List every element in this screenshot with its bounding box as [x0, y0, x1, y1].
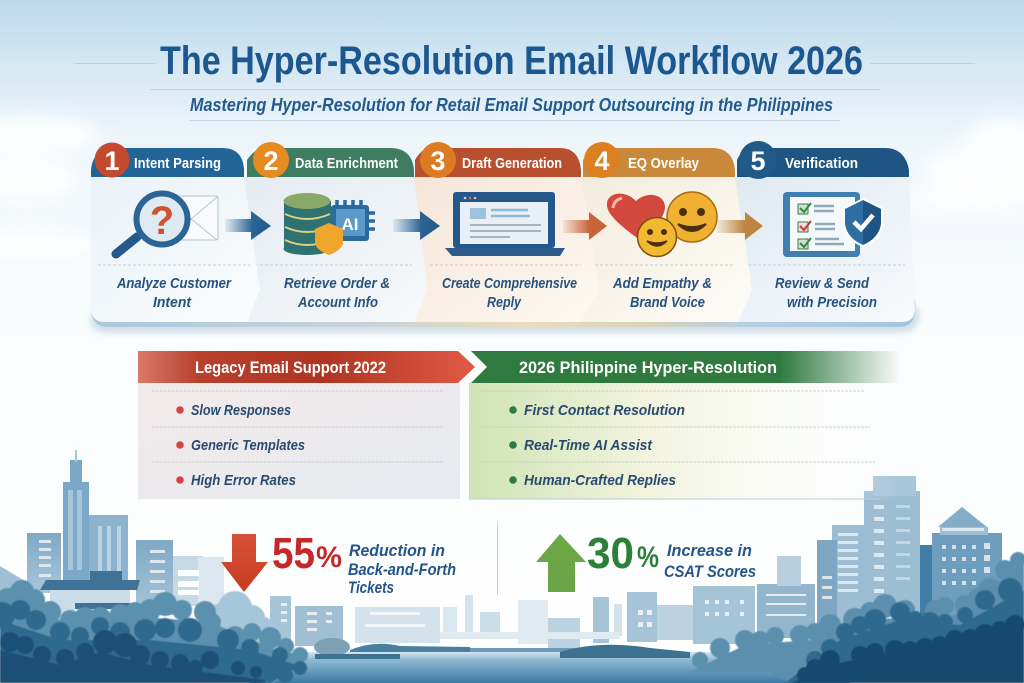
clouds [0, 115, 1024, 259]
legacy items [176, 402, 305, 489]
caption 5 [775, 275, 877, 311]
heading 1: Intent Parsing [134, 155, 221, 172]
caption 4 [612, 275, 712, 311]
legacy items: Generic Templates [191, 437, 305, 454]
heading 2: Data Enrichment [295, 155, 398, 172]
comparison table [138, 351, 900, 499]
figure 55%: % [316, 541, 342, 574]
figure 30%: 30 [587, 529, 634, 578]
water [250, 652, 850, 683]
metrics [184, 520, 800, 597]
icon: checklist with shield [783, 192, 883, 257]
title rules [75, 64, 975, 120]
metric: 30% increase [536, 529, 756, 592]
caption 1: Analyze Customer [116, 275, 232, 292]
badge 5: 5 [750, 146, 766, 176]
heading 4: EQ Overlay [628, 155, 700, 172]
hyper-resolution header [471, 351, 900, 383]
badge 3 [420, 142, 456, 178]
badge 3: 3 [430, 146, 446, 176]
caption 4: Add Empathy & [612, 275, 712, 292]
legacy items: High Error Rates [191, 472, 296, 489]
icon: magnifier and envelope: ? [150, 199, 174, 243]
arrow 3 [563, 212, 607, 240]
caption 3: Reply [487, 294, 522, 311]
caption [664, 541, 756, 581]
title: The Hyper-Resolution Email Workflow 2026 [160, 39, 863, 83]
caption: Tickets [348, 578, 394, 597]
arrow 1 [225, 211, 271, 240]
badge 1: 1 [104, 146, 120, 176]
panel: legacy [138, 351, 475, 499]
arrow 4 [717, 212, 763, 240]
figure 55% [272, 529, 342, 578]
caption 2 [284, 275, 390, 311]
caption 5: Review & Send [775, 275, 870, 292]
caption 1 [116, 275, 232, 311]
hyper-resolution items [509, 402, 685, 489]
caption: CSAT Scores [664, 562, 756, 581]
caption: Reduction in [349, 541, 445, 560]
figure 55%: 55 [272, 529, 315, 578]
legacy items: Slow Responses [191, 402, 291, 419]
icon: database with AI chip: AI [342, 215, 358, 234]
middle buildings [270, 556, 815, 648]
skyline [0, 450, 1024, 683]
figure 30%: % [637, 541, 659, 574]
caption 3 [442, 275, 577, 311]
metric: 55% reduction [221, 529, 456, 597]
legacy header: Legacy Email Support 2022 [195, 359, 386, 377]
caption 4: Brand Voice [630, 294, 705, 311]
icon: laptop [445, 192, 565, 256]
card shadow [90, 300, 920, 333]
hyper-resolution items: First Contact Resolution [524, 402, 685, 419]
icon: database with AI chip [284, 193, 375, 255]
caption 1: Intent [153, 294, 192, 311]
panel: hyper-resolution [469, 351, 900, 499]
badge 4 [584, 142, 620, 178]
heading 3: Draft Generation [462, 155, 562, 172]
right trees [690, 552, 1024, 683]
badge 1 [94, 142, 130, 178]
step 2 card [235, 142, 428, 322]
left trees [0, 580, 308, 683]
card rim [91, 300, 915, 327]
left buildings [0, 450, 224, 622]
badge 5 [739, 141, 777, 179]
hyper-resolution items: Real-Time AI Assist [524, 437, 653, 454]
badge 2 [253, 142, 289, 178]
step 4 card [575, 142, 752, 322]
icon: heart and smileys [607, 192, 717, 256]
caption 5: with Precision [787, 294, 877, 311]
caption [348, 541, 456, 597]
arrow 2 [393, 211, 440, 240]
process steps [90, 141, 920, 333]
icon: down arrow [221, 534, 268, 592]
figure 30% [587, 529, 659, 578]
legacy header [138, 351, 475, 383]
caption: Back-and-Forth [348, 560, 456, 579]
heading 5: Verification [785, 155, 858, 172]
icon: up arrow [536, 534, 586, 592]
caption 2: Account Info [297, 294, 378, 311]
caption: Increase in [667, 541, 752, 560]
step 3 card [405, 142, 599, 322]
step 5 card [725, 141, 915, 322]
caption 2: Retrieve Order & [284, 275, 390, 292]
hyper-resolution header: 2026 Philippine Hyper-Resolution [519, 359, 777, 377]
icon: magnifier and envelope [116, 194, 218, 254]
right buildings [817, 476, 1002, 630]
badge 4: 4 [594, 146, 610, 176]
hyper-resolution items: Human-Crafted Replies [524, 472, 676, 489]
shoreline [314, 638, 690, 659]
step 1 card [91, 142, 260, 322]
caption 3: Create Comprehensive [442, 275, 577, 292]
badge 2: 2 [263, 146, 279, 176]
subtitle: Mastering Hyper-Resolution for Retail Email Support Outsourcing in the Philippines [190, 95, 833, 115]
